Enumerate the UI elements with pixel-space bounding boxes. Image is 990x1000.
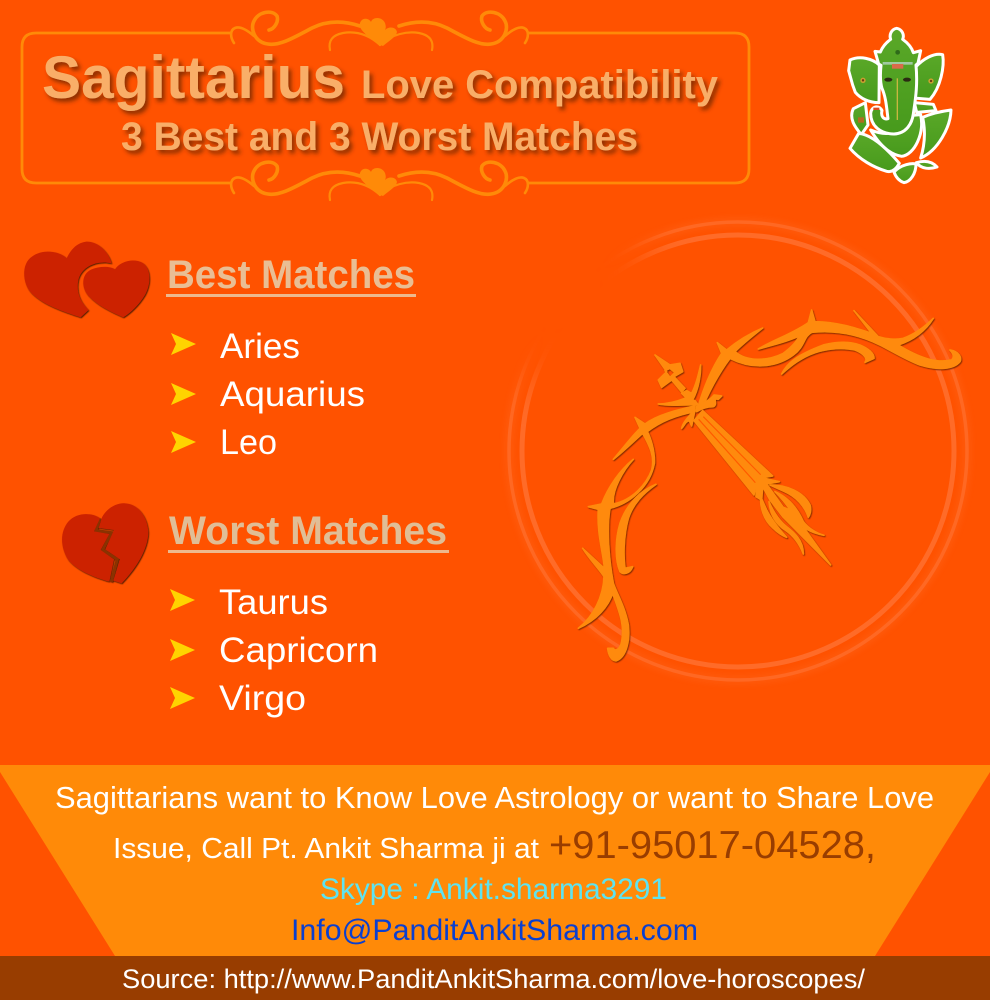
item: Virgo: Virgo: [219, 679, 306, 718]
broken heart right half: [99, 503, 148, 583]
skype contact: Skype : Ankit.sharma3291: [320, 873, 667, 906]
bow lower inner curve: [616, 484, 656, 573]
Ganesha head and trunk: [871, 28, 921, 134]
email contact: Info@PanditAnkitSharma.com: [291, 914, 698, 947]
icon: broken heart: [62, 503, 148, 583]
item: Capricorn: Capricorn: [219, 631, 378, 670]
Ganesha toes: [916, 161, 937, 168]
heading: Worst Matches: Worst Matches: [169, 509, 447, 553]
ornament: bottom flourish: [231, 162, 528, 200]
Ganesha small hand: [914, 103, 936, 112]
bow upper limb: [698, 310, 961, 407]
heading underline: Worst Matches: [168, 550, 449, 553]
item: Aquarius: Aquarius: [220, 375, 365, 414]
broken heart left half: [62, 514, 114, 582]
item: Aries: [171, 327, 300, 366]
Ganesha leg: [850, 133, 899, 172]
item: Taurus: [170, 583, 328, 622]
footer orange banner: [0, 765, 990, 956]
source text: Source: http://www.PanditAnkitSharma.com/love-horoscopes/: [122, 964, 866, 994]
Ganesha face details: [858, 50, 934, 123]
large heart: [24, 242, 112, 317]
background rings: [509, 222, 967, 680]
phone number: +91-95017-04528,: [549, 824, 876, 867]
ornament: top flourish: [231, 12, 528, 50]
item: Taurus: Taurus: [219, 583, 328, 622]
icon: Sagittarius bow and arrow: [578, 310, 961, 661]
bow lower limb: [578, 406, 695, 661]
list: best matches: [171, 327, 365, 462]
arrow shaft grooves: [699, 417, 761, 483]
item: Leo: Leo: [220, 423, 277, 462]
Ganesha left ear: [849, 58, 879, 103]
bow upper inner curve: [782, 342, 874, 374]
footer text line 1: Sagittarians want to Know Love Astrology or want to Share Love: [55, 780, 934, 815]
Ganesha right arm leaf: [921, 110, 951, 158]
icon: two hearts: [24, 242, 149, 317]
title frame with ornaments: [22, 12, 749, 200]
footer text line 2: Issue, Call Pt. Ankit Sharma ji at: [113, 833, 539, 865]
Ganesha belly: [871, 115, 922, 156]
Ganesha foot: [894, 164, 916, 183]
broken heart crack backing: [96, 518, 117, 582]
title line 1: Love Compatibility: [361, 63, 719, 107]
Ganesha right ear: [913, 54, 943, 99]
icon: Ganesha: [849, 28, 951, 183]
source bar: [0, 956, 990, 1000]
title line 2: 3 Best and 3 Worst Matches: [121, 115, 638, 159]
arrow fletching and tail: [756, 477, 831, 565]
title line 1: Sagittarius: [42, 44, 345, 111]
arrow shaft: [694, 411, 773, 495]
small heart: [83, 261, 149, 317]
item: Leo: [171, 423, 277, 462]
arrow feathers: [761, 485, 824, 554]
bow grip ornament: [655, 355, 685, 392]
item: Virgo: [170, 679, 306, 718]
bow grip spikes: [658, 365, 722, 428]
title line 1: [42, 44, 719, 111]
Ganesha left hand: [852, 103, 868, 135]
list: worst matches: [170, 583, 378, 718]
heading: Best Matches: Best Matches: [167, 253, 415, 297]
item: Aries: Aries: [220, 327, 300, 366]
heading underline: Best Matches: [166, 294, 416, 297]
